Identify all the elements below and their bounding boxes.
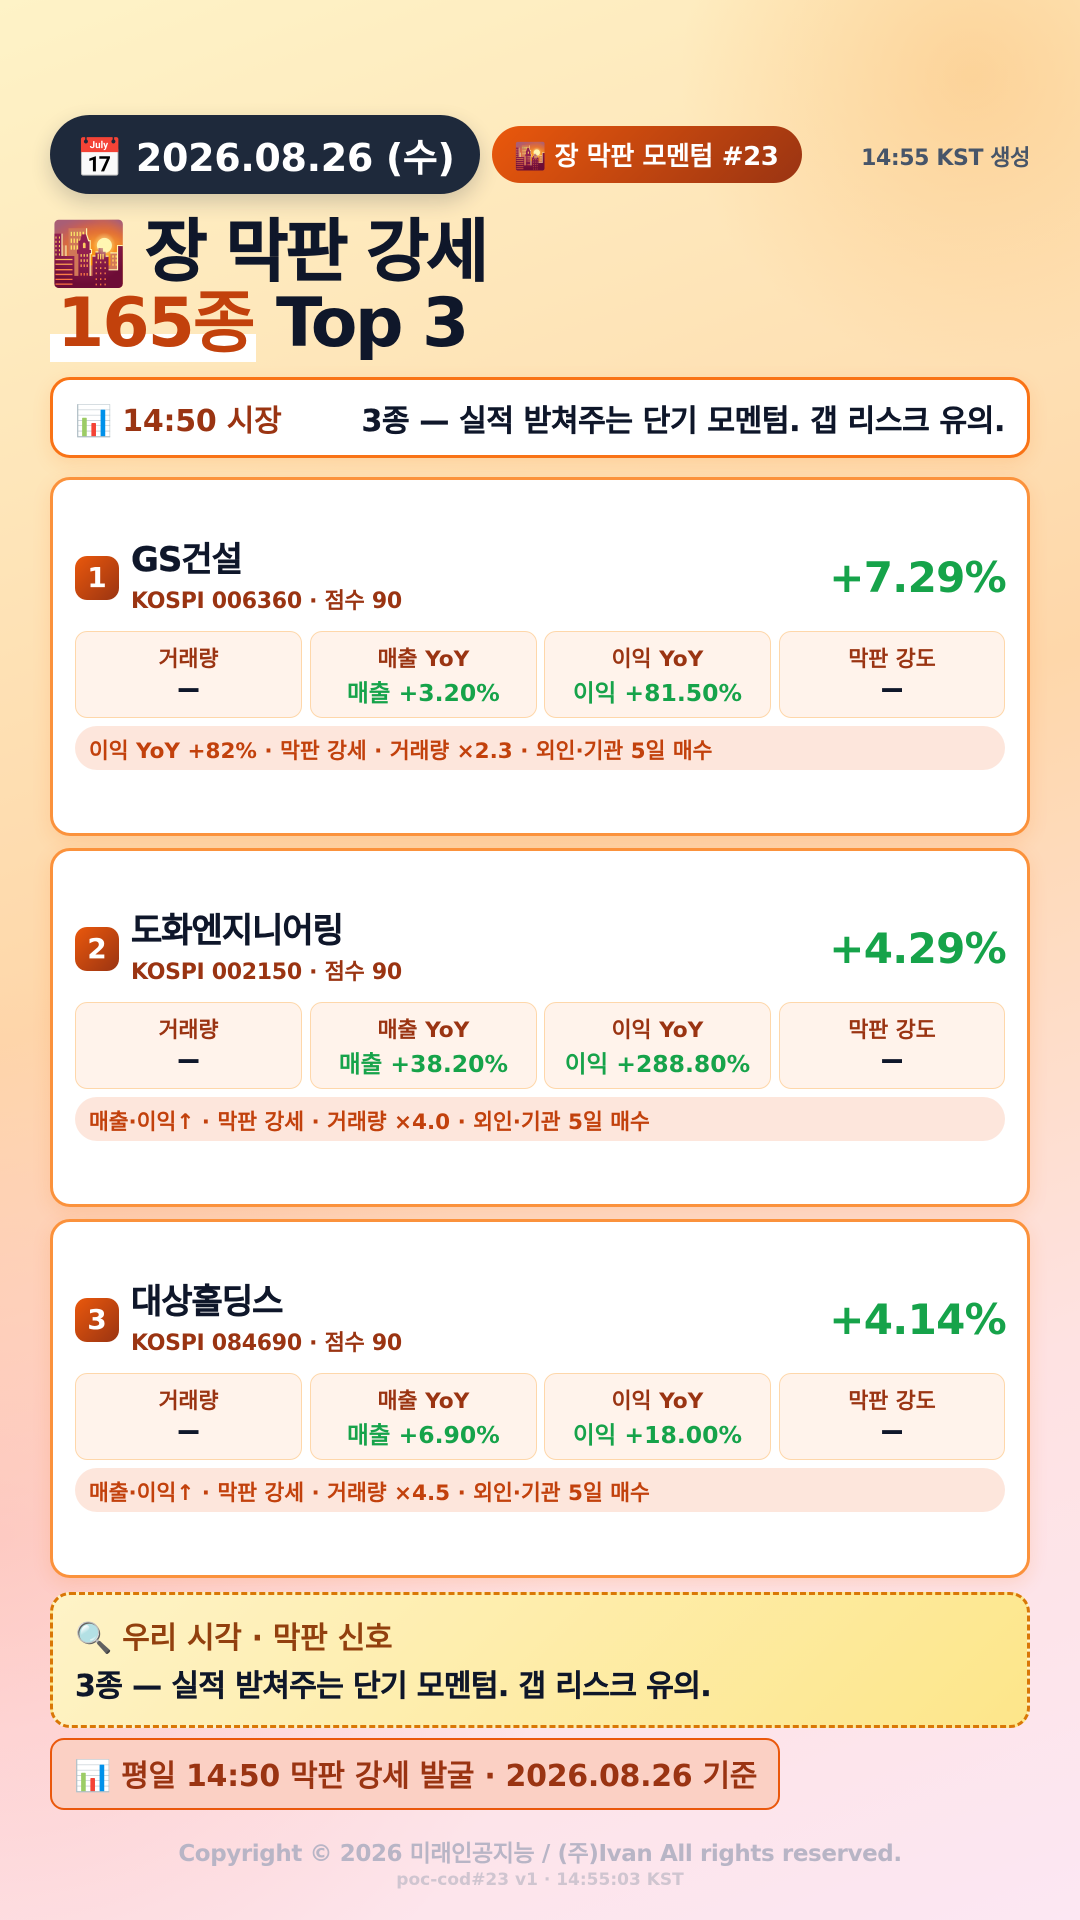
metric: profit: 이익 +288.80%	[565, 1050, 750, 1078]
metric: volume: —	[177, 670, 200, 706]
view text: 3종 — 실적 받쳐주는 단기 모멘텀. 갭 리스크 유의.	[75, 1669, 711, 1704]
stock meta: KOSPI 006360 · 점수 90	[131, 589, 402, 614]
metric: revenue	[310, 631, 537, 718]
metric: closing strength: —	[881, 670, 903, 706]
stock name: 대상홀딩스	[131, 1282, 282, 1322]
metric: profit	[544, 1373, 771, 1460]
metric: closing strength: 막판 강도	[848, 1018, 936, 1043]
metric: revenue: 매출 YoY	[378, 647, 469, 672]
generated time: 14:55 KST 생성	[861, 146, 1030, 171]
note: 매출·이익↑ · 막판 강세 · 거래량 ×4.0 · 외인·기관 5일 매수	[89, 1110, 650, 1135]
note	[75, 1468, 1005, 1512]
metric: profit: 이익 YoY	[612, 1389, 703, 1414]
build info: poc-cod#23 v1 · 14:55:03 KST	[396, 1870, 684, 1890]
metric: volume	[75, 1373, 302, 1460]
title line 1: 장 막판 강세	[145, 213, 486, 292]
metric: revenue: 매출 +38.20%	[339, 1050, 508, 1078]
metric: volume	[75, 631, 302, 718]
copyright: Copyright © 2026 미래인공지능 / (주)Ivan All rights reserved.	[178, 1841, 902, 1867]
panel: our view	[50, 1592, 1030, 1728]
metric: volume	[75, 1002, 302, 1089]
metric: closing strength	[779, 631, 1005, 718]
metric: volume: —	[177, 1412, 200, 1448]
change percent: +4.14%	[829, 1295, 1006, 1344]
rank: 3	[87, 1303, 107, 1336]
metric: closing strength	[779, 1373, 1005, 1460]
metric: closing strength	[779, 1002, 1005, 1089]
title top 3: Top 3	[276, 284, 467, 363]
card 2: 도화엔지니어링	[50, 848, 1030, 1207]
metric: revenue: 매출 YoY	[378, 1389, 469, 1414]
title highlight	[50, 334, 256, 362]
metric: profit: 이익 YoY	[612, 647, 703, 672]
metric: revenue: 매출 +3.20%	[347, 679, 500, 707]
metric: profit: 이익 +81.50%	[573, 679, 742, 707]
title count: 165종	[57, 284, 254, 363]
badge: momentum: 🌇 장 막판 모멘텀 #23	[514, 142, 778, 172]
market label: 📊 14:50 시장	[75, 404, 281, 439]
metric: profit	[544, 631, 771, 718]
metric: revenue: 매출 +6.90%	[347, 1421, 500, 1449]
market summary: 3종 — 실적 받쳐주는 단기 모멘텀. 갭 리스크 유의.	[361, 404, 1005, 439]
view heading: 🔍 우리 시각 · 막판 신호	[75, 1621, 392, 1656]
rank	[75, 1298, 119, 1342]
date pill	[50, 115, 480, 194]
change percent: +4.29%	[829, 924, 1006, 973]
rank: 1	[87, 561, 107, 594]
metric: revenue	[310, 1002, 537, 1089]
note: 이익 YoY +82% · 막판 강세 · 거래량 ×2.3 · 외인·기관 5일 매수	[89, 739, 712, 764]
note: 매출·이익↑ · 막판 강세 · 거래량 ×4.5 · 외인·기관 5일 매수	[89, 1481, 650, 1506]
metric: revenue	[310, 1373, 537, 1460]
metric: profit: 이익 YoY	[612, 1018, 703, 1043]
metric: profit: 이익 +18.00%	[573, 1421, 742, 1449]
rank	[75, 927, 119, 971]
metric: volume: —	[177, 1041, 200, 1077]
stock name: 도화엔지니어링	[131, 911, 343, 951]
metric: profit	[544, 1002, 771, 1089]
metric: volume: 거래량	[159, 1018, 218, 1043]
note	[75, 1097, 1005, 1141]
rank: 2	[87, 932, 107, 965]
card 1: GS건설	[50, 477, 1030, 836]
metric: closing strength: —	[881, 1412, 903, 1448]
stock name: GS건설	[131, 540, 242, 580]
metric: revenue: 매출 YoY	[378, 1018, 469, 1043]
metric: volume: 거래량	[159, 647, 218, 672]
publish badge	[50, 1738, 780, 1810]
metric: closing strength: —	[881, 1041, 903, 1077]
change percent: +7.29%	[829, 553, 1006, 602]
metric: closing strength: 막판 강도	[848, 1389, 936, 1414]
metric: closing strength: 막판 강도	[848, 647, 936, 672]
title icon: 🌇	[50, 217, 127, 290]
note	[75, 726, 1005, 770]
metric: volume: 거래량	[159, 1389, 218, 1414]
date pill: 📅 2026.08.26 (수)	[76, 136, 455, 180]
card 3: 대상홀딩스	[50, 1219, 1030, 1578]
rank	[75, 556, 119, 600]
publish badge: 📊 평일 14:50 막판 강세 발굴 · 2026.08.26 기준	[74, 1759, 757, 1794]
badge: momentum	[492, 126, 802, 183]
stock meta: KOSPI 084690 · 점수 90	[131, 1331, 402, 1356]
stock meta: KOSPI 002150 · 점수 90	[131, 960, 402, 985]
market bar	[50, 377, 1030, 458]
